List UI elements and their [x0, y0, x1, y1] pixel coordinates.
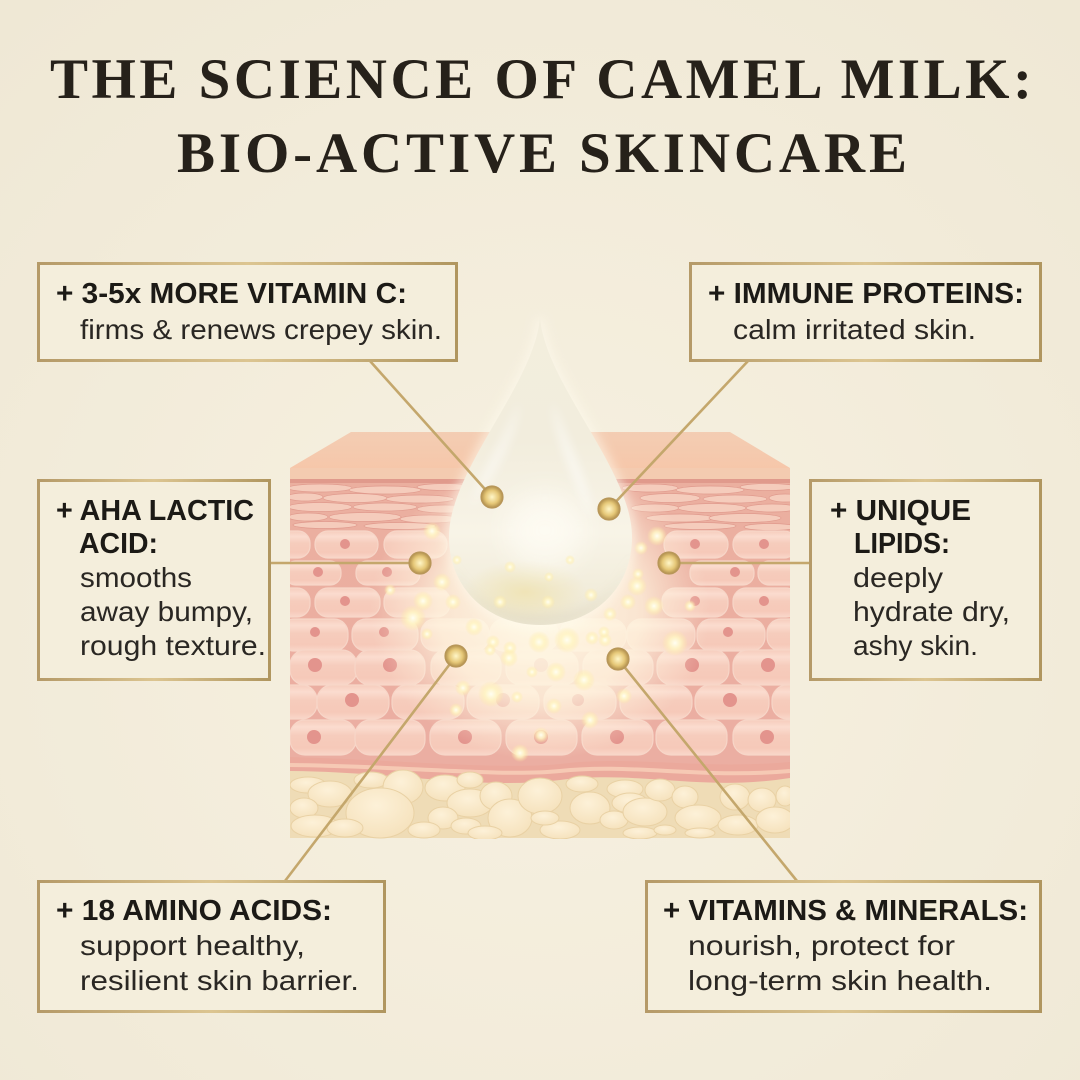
panel: AHA lactic acid: away bumpy, [80, 596, 253, 627]
stratum corneum layer [287, 468, 801, 530]
skin cross-section illustration [290, 432, 790, 839]
panel: AHA lactic acid [38, 480, 270, 680]
panel: amino acids [38, 882, 384, 1012]
leader line: immune proteins [609, 361, 748, 509]
panel: unique lipids: deeply [853, 562, 943, 593]
panel: vitamin C: firms & renews crepey skin. [80, 314, 442, 345]
panel: immune proteins [690, 264, 1040, 360]
title: THE SCIENCE OF CAMEL MILK: [50, 48, 1032, 111]
panel: amino acids: resilient skin barrier. [80, 965, 359, 996]
panel: amino acids: + 18 AMINO ACIDS: [56, 895, 332, 927]
panel: AHA lactic acid: ACID: [79, 528, 158, 560]
panel: amino acids: support healthy, [80, 930, 305, 961]
milk droplet [442, 432, 638, 625]
panel: vitamin C: + 3-5x MORE VITAMIN C: [56, 278, 407, 310]
leader line: amino acids [285, 656, 456, 881]
panel: immune proteins: calm irritated skin. [733, 314, 976, 345]
panel: AHA lactic acid: rough texture. [80, 630, 266, 661]
panel: unique lipids: LIPIDS: [854, 528, 950, 560]
panel: AHA lactic acid: smooths [80, 562, 192, 593]
droplet halo [449, 318, 632, 625]
leader line: vitamin C [370, 361, 492, 497]
panel: vitamins and minerals: nourish, protect for [688, 930, 955, 961]
leader line: vitamins and minerals [618, 659, 797, 881]
panel: unique lipids [810, 480, 1040, 680]
panel: vitamins and minerals: + VITAMINS & MINERALS: [663, 895, 1028, 927]
title [50, 48, 1032, 185]
basement membrane [348, 773, 790, 783]
panel: unique lipids: + UNIQUE [830, 495, 971, 527]
leader line: unique lipids [669, 562, 810, 564]
sparkles [384, 522, 696, 762]
gold connector dots [409, 486, 680, 670]
panel: vitamins and minerals [646, 882, 1040, 1012]
panel: vitamins and minerals: long-term skin health. [688, 965, 992, 996]
droplet sparkles [452, 555, 598, 609]
title: BIO-ACTIVE SKINCARE [177, 122, 907, 185]
cell nuclei [307, 539, 775, 744]
skin body base [290, 468, 790, 773]
panel: unique lipids: ashy skin. [853, 630, 978, 661]
glow around drop [380, 495, 700, 748]
panel: AHA lactic acid: + AHA LACTIC [56, 495, 254, 527]
panel: unique lipids: hydrate dry, [853, 596, 1010, 627]
panel: vitamin C [38, 264, 456, 360]
panel: immune proteins: + IMMUNE PROTEINS: [708, 278, 1024, 310]
skin surface top plane [290, 432, 790, 468]
subcutaneous fat layer [290, 770, 794, 840]
droplet body [449, 318, 632, 625]
droplet shading [470, 428, 587, 623]
leader line: AHA lactic acid [270, 562, 420, 564]
epidermal cells [290, 530, 790, 756]
